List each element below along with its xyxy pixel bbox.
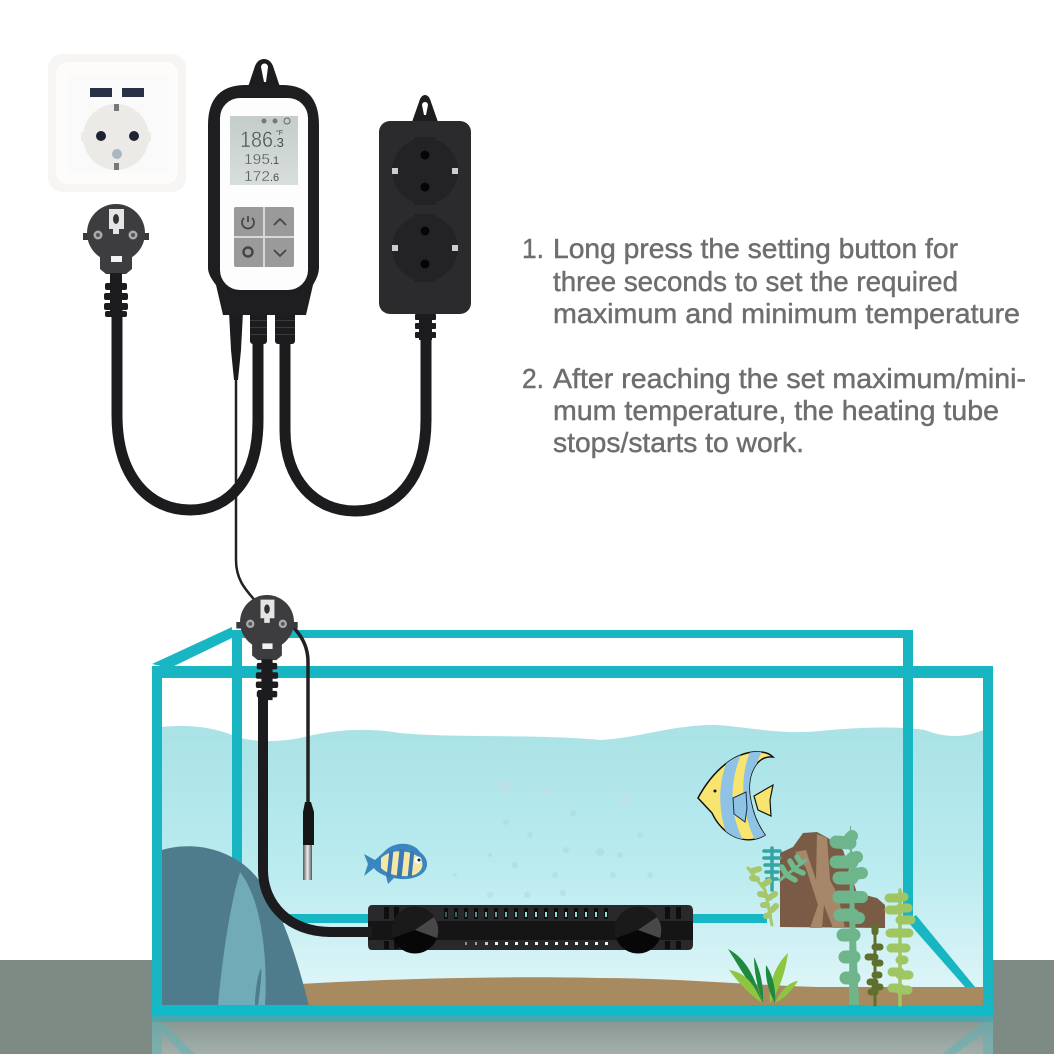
plant: light green bbox=[889, 890, 911, 1005]
plants bbox=[728, 826, 911, 1005]
back frame bbox=[152, 627, 975, 987]
decor rock bbox=[780, 832, 885, 928]
step 2 bbox=[522, 363, 1026, 458]
icon: power bbox=[242, 216, 254, 228]
lcd display: 172 bbox=[244, 168, 270, 185]
heater slots bbox=[384, 907, 681, 949]
heater lower dots bbox=[465, 942, 608, 945]
left power cable loop bbox=[117, 310, 258, 510]
lcd display bbox=[230, 116, 298, 185]
step 1: 1. bbox=[522, 233, 544, 264]
plant: grass bbox=[728, 949, 798, 1003]
sensor wire from controller bbox=[236, 370, 258, 604]
suction cup right bbox=[614, 906, 662, 954]
control buttons bbox=[234, 207, 294, 267]
plant: dark green bbox=[868, 923, 880, 1005]
suction cup left bbox=[392, 906, 438, 954]
step 2: mum temperature, the heating tube bbox=[553, 395, 999, 426]
air stones and bubbles bbox=[453, 780, 653, 898]
instructions text bbox=[522, 233, 1026, 458]
socket lower bbox=[392, 214, 458, 282]
icon: up bbox=[274, 219, 286, 225]
plant: light leafy bbox=[748, 868, 776, 925]
step 1: Long press the setting button for bbox=[553, 233, 958, 264]
lcd display: .1 bbox=[270, 155, 279, 167]
right power cable loop bbox=[285, 335, 426, 511]
rock: blue stone bbox=[162, 846, 309, 1006]
aquarium tank bbox=[152, 627, 993, 1054]
lcd display: °F bbox=[276, 129, 283, 137]
wall socket bbox=[48, 54, 186, 192]
step 1: three seconds to set the required bbox=[553, 266, 958, 297]
heater tube bbox=[368, 905, 693, 954]
plug at wall bbox=[83, 204, 149, 317]
table surface bbox=[0, 960, 1054, 1054]
outlet box bbox=[379, 95, 471, 340]
step 2: After reaching the set maximum/mini- bbox=[553, 363, 1026, 394]
hanger bbox=[248, 59, 280, 87]
icon: gear bbox=[244, 248, 252, 256]
usb ports bbox=[90, 88, 144, 97]
water bbox=[162, 725, 983, 1006]
step 1 bbox=[522, 233, 1020, 329]
step 2: stops/starts to work. bbox=[553, 427, 804, 458]
step 1: maximum and minimum temperature bbox=[553, 298, 1020, 329]
tank reflection bbox=[152, 1022, 993, 1054]
heater power cable bbox=[263, 690, 372, 932]
heater glints bbox=[445, 912, 607, 917]
step 2: 2. bbox=[522, 363, 544, 394]
plant: fern teal bbox=[764, 848, 780, 890]
angelfish bbox=[698, 748, 773, 842]
controller unit bbox=[208, 59, 319, 380]
plug in tank bbox=[236, 595, 298, 700]
icon: down bbox=[274, 250, 286, 256]
lcd display: 186 bbox=[240, 127, 273, 152]
plant: green sprig bbox=[780, 857, 806, 880]
relief ribs bbox=[250, 320, 295, 335]
rock highlight bbox=[795, 834, 845, 928]
plant: tall green bbox=[836, 826, 862, 1005]
cable reliefs bbox=[229, 312, 295, 380]
front frame bbox=[152, 666, 993, 1022]
lcd display: 195 bbox=[244, 151, 270, 168]
socket upper bbox=[392, 137, 458, 205]
lcd display: .6 bbox=[270, 172, 279, 184]
temperature probe bbox=[293, 627, 314, 880]
lcd display: .3 bbox=[273, 135, 284, 150]
casing bbox=[208, 85, 319, 315]
sand bbox=[300, 977, 983, 1006]
small striped fish bbox=[364, 844, 427, 884]
